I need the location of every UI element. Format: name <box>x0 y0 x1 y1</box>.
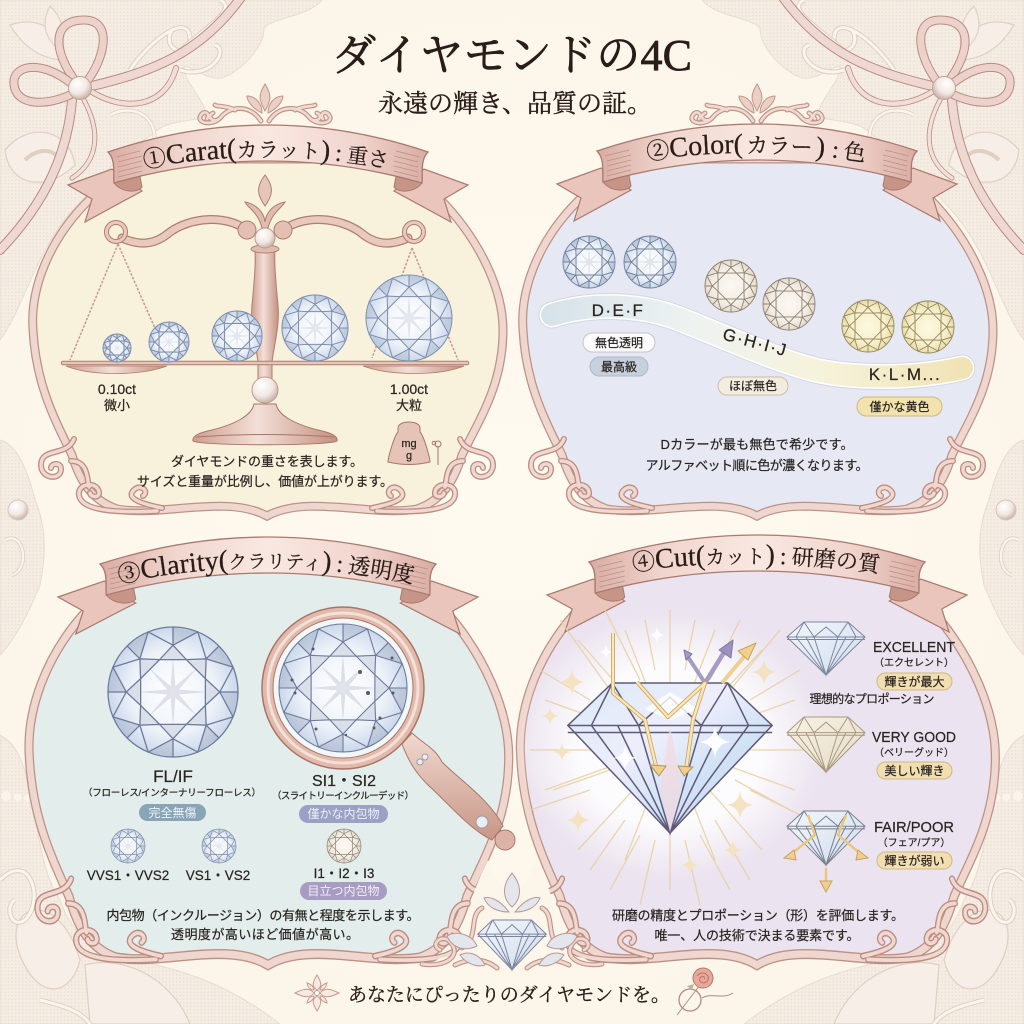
pill: colorless <box>583 333 655 352</box>
bottom center ornament <box>422 860 602 974</box>
banner: clarity: ③Clarity(クラリティ):透明度 <box>118 549 415 585</box>
pill: highest grade <box>590 357 648 376</box>
icon: weight: mg <box>401 438 417 450</box>
pill: visible inclusions <box>300 882 387 900</box>
grade: excellent: 輝きが最大 <box>884 674 945 689</box>
panel: cut <box>516 534 1000 971</box>
text: carat description <box>137 454 393 489</box>
labels: VVS VS I: I1・I2・I3 <box>314 866 374 881</box>
footer flower <box>295 975 339 1011</box>
light rays and glow <box>515 600 825 905</box>
footer text: あなたにぴったりのダイヤモンドを。 <box>348 984 670 1006</box>
band letters: D·E·F <box>592 301 644 320</box>
diamond: very good <box>787 717 865 772</box>
label: SI1・SI2: （スライトリーインクルーデッド） <box>272 790 414 802</box>
grade: fair poor: 輝きが弱い <box>884 853 945 868</box>
label: SI1・SI2: SI1・SI2 <box>312 773 376 790</box>
pill: flawless: 完全無傷 <box>148 805 197 820</box>
diamonds on scale <box>103 275 452 362</box>
ribbon bows <box>0 0 1024 250</box>
banner: clarity <box>56 536 480 636</box>
band letters: G·H·I·J <box>721 325 790 360</box>
pill: faint yellow <box>857 397 942 416</box>
band letters <box>592 301 941 384</box>
text: cut description <box>612 908 904 943</box>
label: 1.00ct: 大粒 <box>396 398 422 413</box>
text: carat description: サイズと重量が比例し、価値が上がります。 <box>137 474 393 489</box>
icon: ring and rose <box>677 968 733 1015</box>
text: clarity description <box>106 908 420 942</box>
grade: excellent: 理想的なプロポーション <box>810 691 934 706</box>
grade: fair poor: （フェア/プア） <box>878 837 950 849</box>
banner: cut <box>546 534 968 634</box>
large diamond <box>568 683 772 833</box>
panel: color <box>518 83 998 521</box>
label: FL/IF: FL/IF <box>153 767 193 786</box>
grade: excellent: EXCELLENT <box>873 639 955 656</box>
pill: colorless: 無色透明 <box>595 335 643 350</box>
grade: very good: VERY GOOD <box>872 729 956 746</box>
sparkles <box>541 627 777 874</box>
icon: weight: g <box>406 450 412 462</box>
grade: very good <box>872 729 956 779</box>
color diamonds <box>563 236 954 353</box>
magnifying glass <box>262 607 515 850</box>
banner: carat <box>66 124 470 224</box>
pill: visible inclusions: 目立つ内包物 <box>307 883 380 898</box>
grade: excellent <box>810 639 955 706</box>
text: clarity description: 透明度が高いほど価値が高い。 <box>171 927 359 942</box>
light path arrows <box>613 633 756 776</box>
banner: color <box>556 123 958 222</box>
small clarity diamonds <box>111 829 361 863</box>
icon: weight <box>388 422 441 465</box>
grade: excellent: （エクセレント） <box>874 657 954 669</box>
panel: clarity <box>24 536 516 971</box>
banner: cut: ④Cut(カット):研磨の質 <box>632 544 880 574</box>
diamond: fair poor <box>784 811 868 892</box>
label: 0.10ct <box>98 381 136 413</box>
pill: near colorless: ほぼ無色 <box>729 378 777 393</box>
color scale band <box>552 307 962 376</box>
labels: VVS VS I: VVS1・VVS2 <box>87 868 169 883</box>
label: 1.00ct: 1.00ct <box>390 381 428 397</box>
pill: near colorless <box>718 377 788 395</box>
text: clarity description: 内包物（インクルージョン）の有無と程度を示します。 <box>106 908 420 923</box>
label: 1.00ct <box>390 381 428 413</box>
banner: color: ②Color(カラー):色 <box>647 133 864 162</box>
label: 0.10ct: 0.10ct <box>98 381 136 397</box>
diamond: excellent <box>787 622 865 675</box>
balance scale <box>63 175 467 445</box>
grade: very good: （ベリーグッド） <box>874 746 954 759</box>
text: cut description: 研磨の精度とプロポーション（形）を評価します。 <box>612 908 904 923</box>
pill: highest grade: 最高級 <box>601 360 637 374</box>
pill: faint yellow: 僅かな黄色 <box>869 400 930 414</box>
label: SI1・SI2 <box>272 773 414 802</box>
pill: slight inclusions <box>299 805 388 823</box>
grade: fair poor <box>874 819 954 869</box>
pill: flawless <box>139 804 206 821</box>
grade: very good: 美しい輝き <box>884 764 945 778</box>
label: 0.10ct: 微小 <box>104 398 130 413</box>
title: ダイヤモンドの4C <box>332 31 692 80</box>
text: color description: Dカラーが最も無色で希少です。 <box>660 437 854 452</box>
pill: slight inclusions: 僅かな内包物 <box>307 806 380 821</box>
labels: VVS VS I <box>87 866 374 883</box>
label: FL/IF <box>83 767 261 799</box>
text: color description <box>646 437 868 473</box>
grade: fair poor: FAIR/POOR <box>874 819 954 836</box>
text: color description: アルファベット順に色が濃くなります。 <box>646 458 868 473</box>
text: cut description: 唯一、人の技術で決まる要素です。 <box>654 928 860 943</box>
banner: carat: ①Carat(カラット):重さ <box>144 138 386 168</box>
text: carat description: ダイヤモンドの重さを表します。 <box>171 454 363 469</box>
panel: carat <box>28 83 508 521</box>
label: FL/IF: （フローレス/インターナリーフローレス） <box>83 787 261 799</box>
labels: VVS VS I: VS1・VS2 <box>186 868 250 883</box>
big flawless diamond <box>108 627 238 757</box>
subtitle: 永遠の輝き、品質の証。 <box>378 90 652 118</box>
band letters: K·L·M... <box>869 365 941 384</box>
